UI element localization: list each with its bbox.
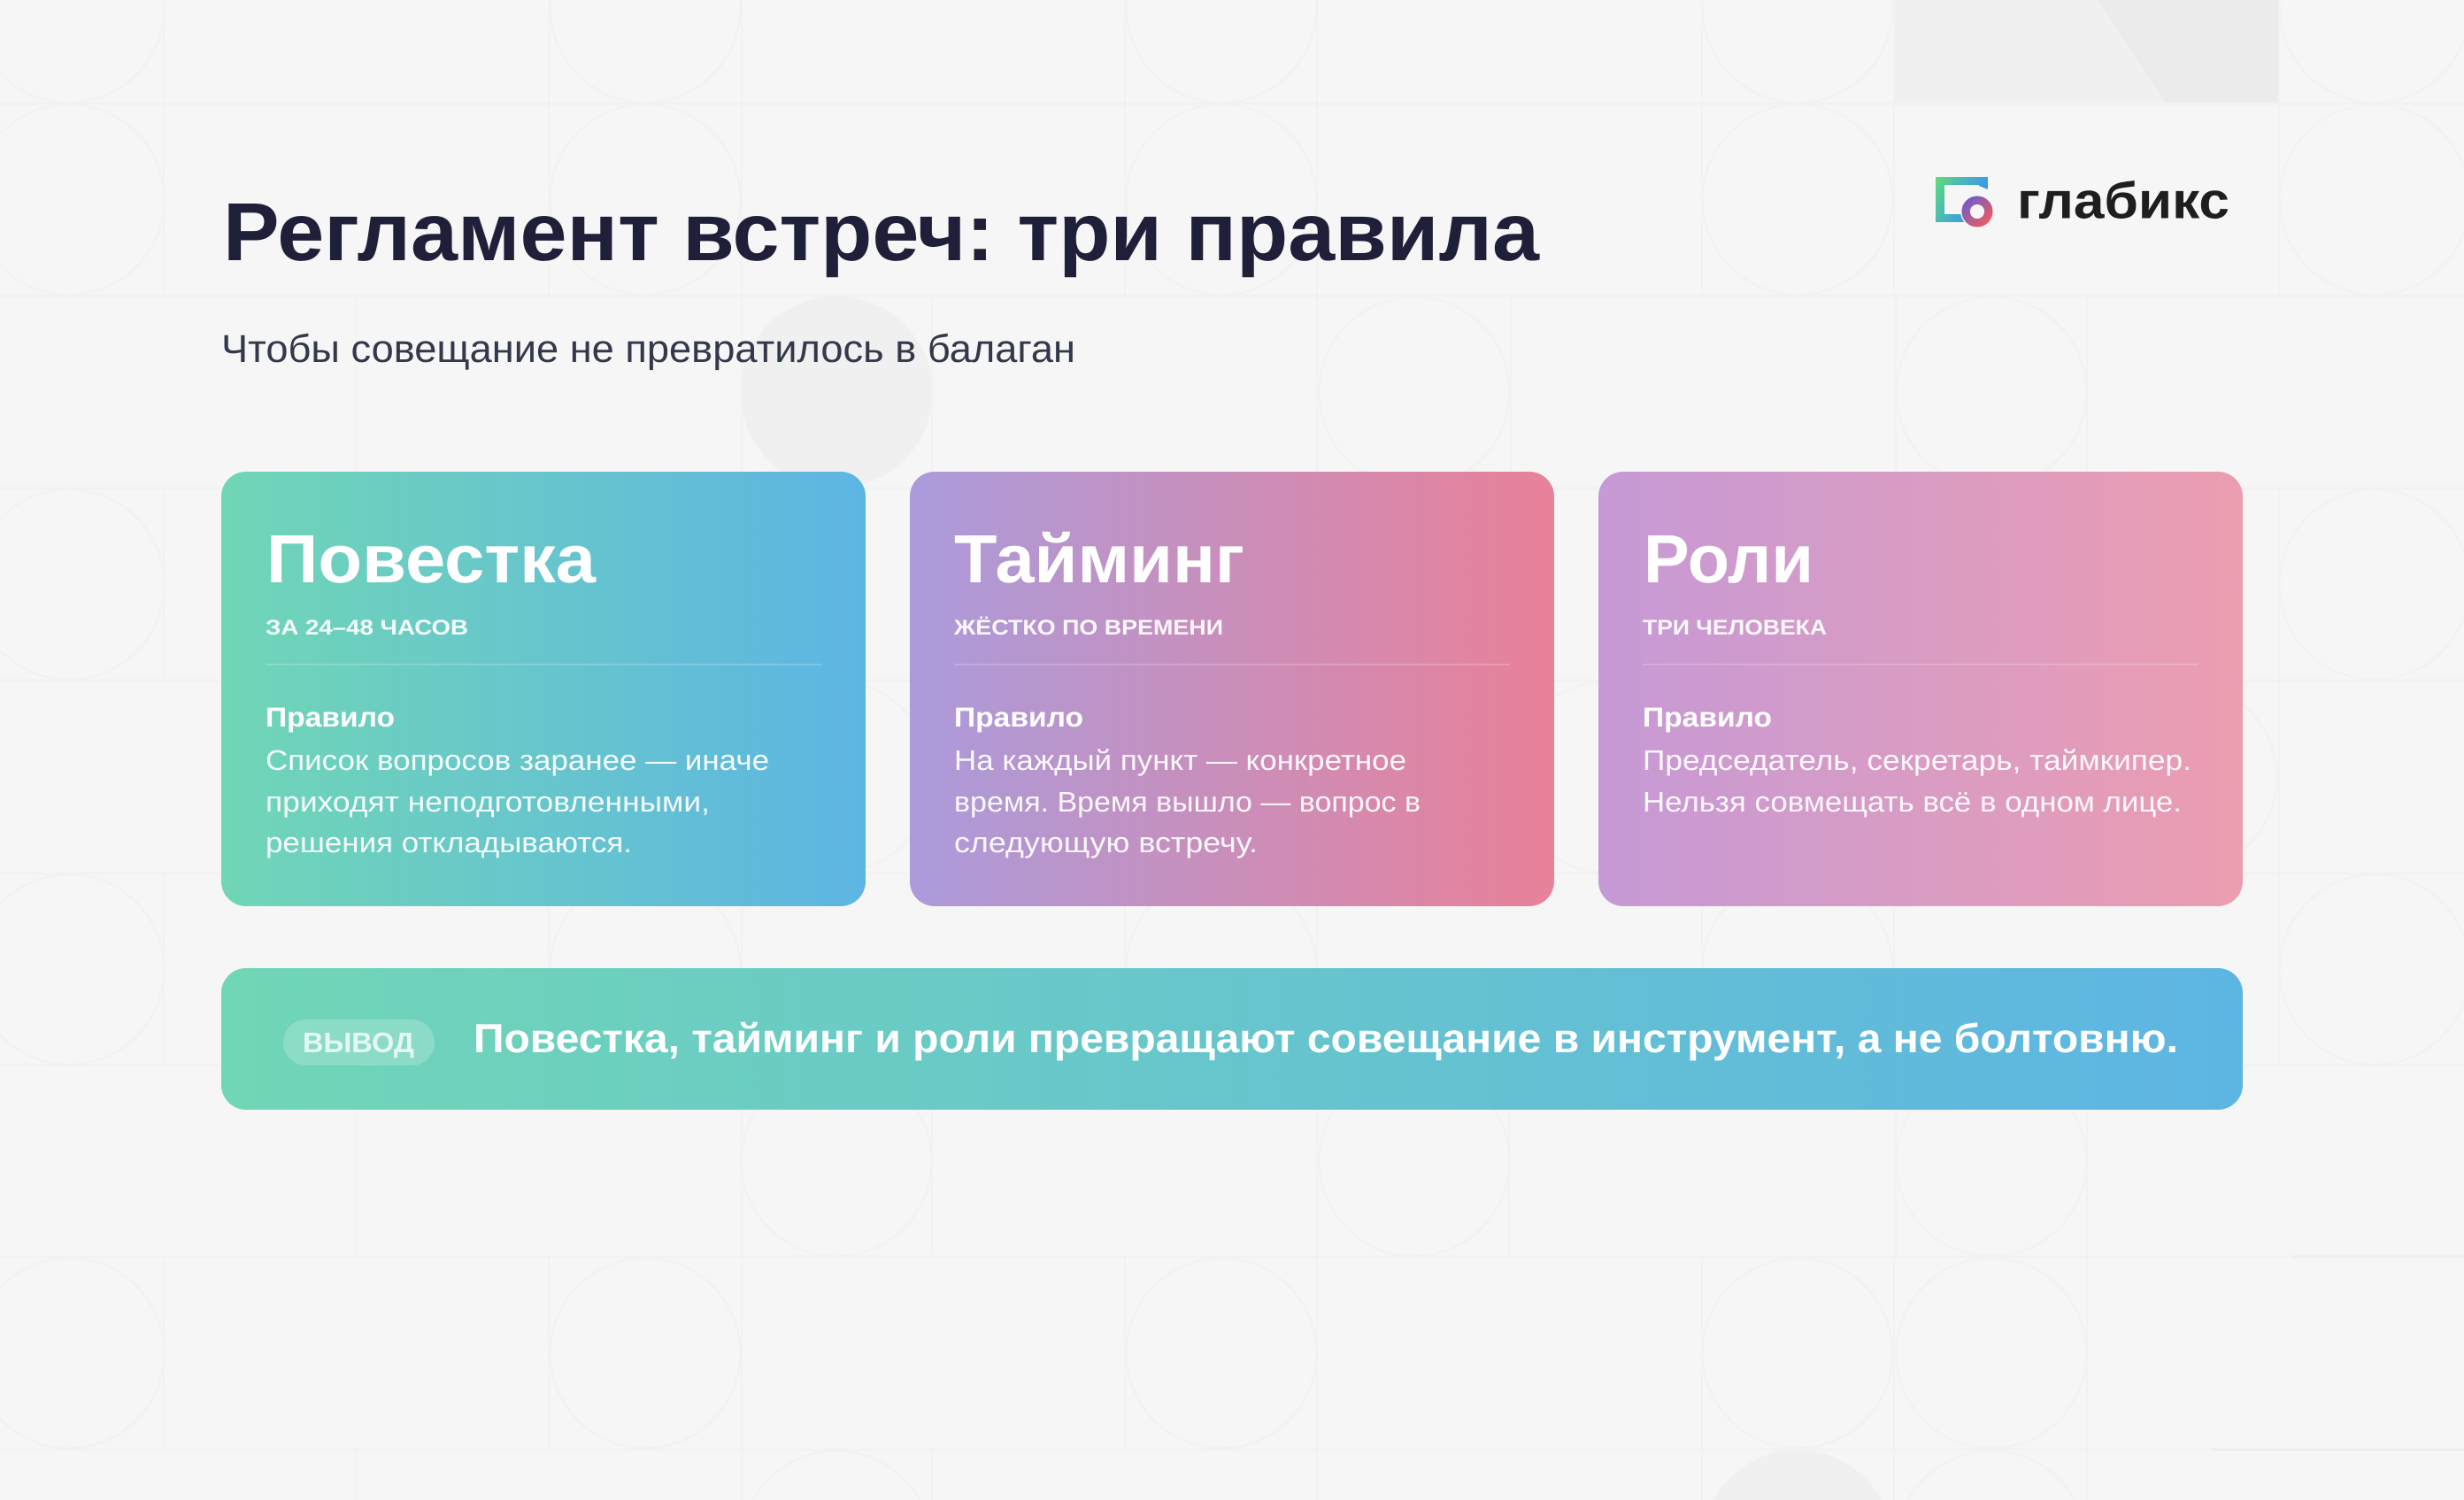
card subheading: ЖЁСТКО ПО ВРЕМЕНИ — [953, 616, 1223, 640]
rule text: На каждый пункт — конкретное — [954, 744, 1406, 776]
conclusion badge: ВЫВОД — [303, 1027, 414, 1058]
rule text: приходят неподготовленными, — [266, 786, 710, 818]
rule label: Правило — [1643, 702, 1772, 733]
logo: глабикс — [1936, 172, 2229, 230]
panel: Повестка — [221, 472, 866, 906]
card subheading: ЗА 24–48 ЧАСОВ — [266, 616, 468, 640]
rule label: Правило — [266, 702, 395, 733]
conclusion text: Повестка, тайминг и роли превращают совещание в инструмент, а не болтовню. — [474, 1015, 2178, 1061]
rule text: Председатель, секретарь, таймкипер. — [1643, 744, 2191, 776]
icon: logo mark — [1936, 177, 1994, 228]
rule text: время. Время вышло — вопрос в — [954, 786, 1421, 818]
rule text: Список вопросов заранее — иначе — [266, 744, 769, 776]
panel: Тайминг — [910, 472, 1554, 906]
title: Регламент встреч: три правила — [223, 186, 1540, 278]
rule label: Правило — [954, 702, 1083, 733]
logo wordmark: глабикс — [2017, 172, 2229, 230]
conclusion badge — [283, 1019, 435, 1065]
conclusion banner — [221, 968, 2243, 1110]
card heading: Повестка — [266, 521, 597, 597]
card heading: Роли — [1644, 521, 1813, 597]
rule text — [954, 744, 1421, 858]
rule text: Нельзя совмещать всё в одном лице. — [1643, 786, 2182, 818]
card heading: Тайминг — [954, 521, 1244, 597]
subtitle: Чтобы совещание не превратилось в балаган — [221, 327, 1075, 371]
panel: Роли — [1598, 472, 2243, 906]
rule text: следующую встречу. — [954, 827, 1258, 858]
card subheading: ТРИ ЧЕЛОВЕКА — [1643, 616, 1827, 640]
rule text — [1643, 744, 2191, 818]
rule text — [266, 744, 769, 858]
rule text: решения откладываются. — [266, 827, 632, 858]
